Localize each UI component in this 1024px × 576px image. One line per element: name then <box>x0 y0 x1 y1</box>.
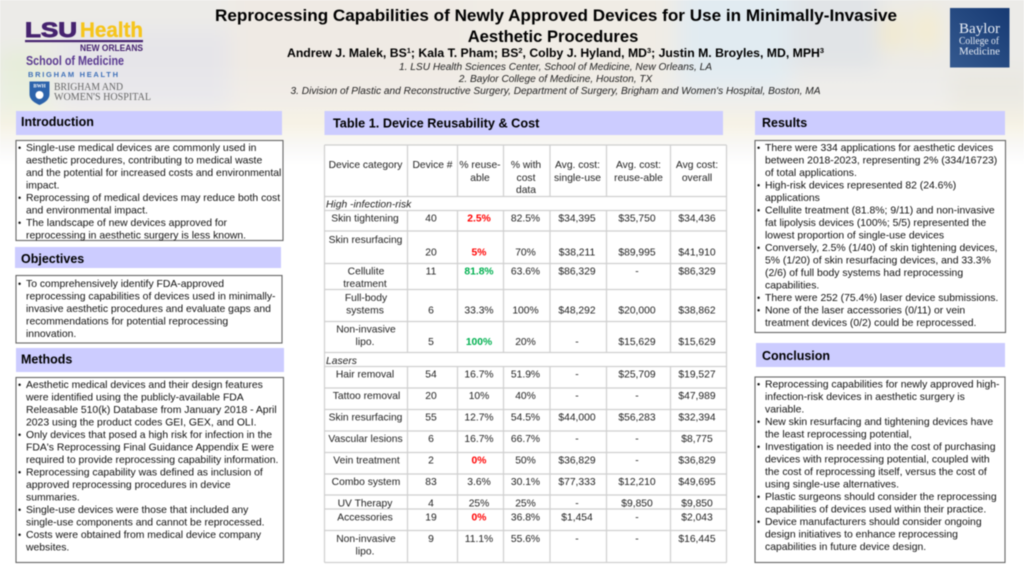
panel: methods text: Aesthetic medical devices and their design features <box>26 380 263 391</box>
table header row <box>329 160 718 196</box>
panel: results text: • <box>757 293 760 303</box>
row: non-invasive lipo, high risk: $15,629 <box>678 337 716 348</box>
panel: introduction text: Single-use medical devices are commonly used in <box>26 143 257 154</box>
row: hair removal: $19,527 <box>678 370 716 380</box>
authors: , Colby J. Hyland, MD <box>523 47 647 60</box>
panel: results text: • <box>757 180 760 190</box>
panel: introduction text: • <box>18 143 21 153</box>
table header row: overall <box>682 173 712 184</box>
row: cellulite treatment: 11 <box>426 266 437 278</box>
row: hair removal: Hair removal <box>336 370 394 380</box>
panel: conclusion text: the cost of reprocessing itself, versus the cost of <box>765 467 987 478</box>
panel: table heading <box>324 111 723 135</box>
row: non-invasive lipo, lasers: 55.6% <box>511 534 540 545</box>
row: tattoo removal: - <box>635 391 639 402</box>
table header row: single-use <box>554 173 601 184</box>
row: vascular lesions: 6 <box>428 434 434 445</box>
panel: results text: 5% (1/20) of skin resurfacing devices, and 33.3% <box>765 256 991 266</box>
row: accessories: $2,043 <box>681 512 713 524</box>
row: vascular lesions <box>328 434 713 445</box>
table header row: % with <box>511 160 541 171</box>
panel: results text: of total applications. <box>765 168 857 179</box>
row: non-invasive lipo, high risk: lipo. <box>356 337 374 348</box>
row: vein treatment: Vein treatment <box>333 456 400 466</box>
row: skin tightening <box>331 214 716 224</box>
panel: introduction text: aesthetic procedures, contributing to medical waste <box>26 156 262 166</box>
panel: objectives text: recommendations for potential reprocessing <box>26 316 228 328</box>
row: cellulite treatment: Cellulite <box>348 266 385 278</box>
logo: Baylor College of Medicine: College of <box>959 36 1000 47</box>
affiliations: 2. Baylor College of Medicine, Houston, TX <box>458 74 654 85</box>
title: Aesthetic Procedures <box>468 27 638 46</box>
row: full-body systems: 6 <box>428 306 434 316</box>
row: accessories: - <box>635 512 639 524</box>
row: non-invasive lipo, lasers: - <box>635 534 639 545</box>
row: combo system <box>332 477 716 488</box>
panel: results text: (2/6) of full body systems had reprocessing <box>765 268 963 279</box>
panel: objectives text: To comprehensively identify FDA-approved <box>26 279 224 290</box>
row: non-invasive lipo, high risk <box>336 324 716 348</box>
row: non-invasive lipo, lasers: 11.1% <box>465 534 493 545</box>
row: non-invasive lipo, high risk: Non-invasive <box>336 324 396 336</box>
row: cellulite treatment: 81.8% <box>464 266 494 278</box>
row: cellulite treatment: $86,329 <box>678 266 716 278</box>
panel: conclusion text: Device manufacturers should consider ongoing <box>765 517 982 528</box>
panel: conclusion text: • <box>757 417 760 427</box>
panel: methods text: • <box>18 505 21 515</box>
row: vein treatment <box>333 456 716 466</box>
title: Reprocessing Capabilities of Newly Approved Devices for Use in Minimally-Invasive <box>215 6 897 25</box>
row: full-body systems <box>345 293 716 316</box>
panel: conclusion text: Reprocessing capabilities for newly approved high- <box>765 380 1000 390</box>
logo: Brigham Health, Brigham and Women's Hospital: BRIGHAM HEALTH <box>28 70 118 79</box>
panel: introduction text <box>16 140 283 242</box>
row: vein treatment: - <box>635 456 639 466</box>
table header row: Avg. cost: <box>616 160 661 171</box>
panel: results heading: Results <box>762 116 807 130</box>
panel: results text: applications <box>765 193 820 204</box>
row: full-body systems: $20,000 <box>618 306 656 316</box>
row: cellulite treatment: 63.6% <box>511 266 540 278</box>
row: skin resurfacing: $41,910 <box>678 248 716 258</box>
row: skin resurfacing, lasers: $44,000 <box>558 412 596 424</box>
panel: results text: High-risk devices represented 82 (24.6%) <box>765 180 956 192</box>
panel: conclusion heading: Conclusion <box>762 349 830 363</box>
row: vascular lesions: - <box>575 434 579 445</box>
panel: introduction heading: Introduction <box>21 115 94 129</box>
table header row: Device category <box>329 160 403 171</box>
table header row: Avg cost: <box>676 160 718 171</box>
row: skin resurfacing: 70% <box>515 248 536 258</box>
panel: methods text: Costs were obtained from medical device company <box>26 530 262 541</box>
panel: results text: • <box>757 306 760 316</box>
table header row: % reuse- <box>459 160 501 171</box>
row: combo system: $49,695 <box>678 477 716 488</box>
row: skin resurfacing, lasers: Skin resurfacing <box>329 412 403 424</box>
panel: introduction text: The landscape of new devices approved for <box>26 218 228 229</box>
row: tattoo removal <box>333 391 716 402</box>
row: cellulite treatment: treatment <box>343 279 387 290</box>
row: vascular lesions: 16.7% <box>464 434 494 445</box>
logo: LSU Health New Orleans School of Medicine: NEW ORLEANS <box>80 43 143 53</box>
panel: introduction text: and the potential for increased costs and environmental <box>26 168 281 179</box>
row: combo system: $77,333 <box>558 477 596 488</box>
authors: ; Justin M. Broyles, MD, MPH <box>651 47 820 60</box>
row: combo system: 83 <box>425 477 437 488</box>
row: skin resurfacing, lasers: 54.5% <box>511 412 540 424</box>
panel: conclusion text: variable. <box>765 404 804 416</box>
panel: methods text: Releasable 510(k) Database from January 2018 - April <box>26 405 277 416</box>
panel: conclusion text: infection-risk devices in aesthetic surgery is <box>765 392 965 403</box>
logo: LSU Health New Orleans School of Medicine: School of Medicine <box>26 54 124 68</box>
panel: results text: There were 252 (75.4%) laser device submissions. <box>765 293 998 304</box>
row: UV therapy: - <box>575 498 579 510</box>
icon: BWH shield: BWH <box>33 84 46 90</box>
panel: conclusion text: devices with reprocessing potential, coupled with <box>765 454 990 466</box>
row: non-invasive lipo, lasers: lipo. <box>356 546 374 558</box>
panel: results text: Cellulite treatment (81.8%; 9/11) and non-invasive <box>765 206 995 216</box>
panel: conclusion text <box>755 377 1005 562</box>
panel: conclusion text: • <box>757 442 760 452</box>
affiliations: 1. LSU Health Sciences Center, School of Medicine, New Orleans, LA <box>399 62 712 73</box>
panel: results text: There were 334 applications for aesthetic devices <box>765 143 993 154</box>
panel: objectives text: reprocessing capabilities of devices used in minimally- <box>26 292 276 302</box>
row: UV therapy: 25% <box>469 498 489 510</box>
table header row: Avg. cost: <box>555 160 600 171</box>
panel: results text: fat lipolysis devices (100%; 5/5) represented the <box>765 218 986 229</box>
row: combo system: 3.6% <box>467 477 491 488</box>
logo: Brigham Health, Brigham and Women's Hospital <box>28 70 151 105</box>
row: skin tightening: 2.5% <box>467 214 491 224</box>
row: skin resurfacing, lasers: 12.7% <box>464 412 494 424</box>
panel: results text: treatment devices (0/2) could be reprocessed. <box>765 318 976 329</box>
panel: results text: lowest proportion of single-use devices <box>765 230 944 242</box>
row: combo system: 30.1% <box>511 477 540 488</box>
row: accessories: 19 <box>425 512 437 524</box>
panel: conclusion text: Investigation is needed into the cost of purchasing <box>765 442 996 453</box>
panel: objectives text: invasive aesthetic procedures and evaluate gaps and <box>26 304 271 315</box>
panel: conclusion text: Plastic surgeons should consider the reprocessing <box>765 492 997 503</box>
panel: objectives text: innovation. <box>26 329 76 340</box>
panel: introduction text: impact. <box>26 180 60 192</box>
authors: 3 <box>647 48 651 55</box>
row: UV therapy: 25% <box>515 498 536 510</box>
row: hair removal <box>336 370 716 380</box>
panel: objectives heading <box>15 247 281 268</box>
panel: methods heading: Methods <box>21 352 72 366</box>
panel: conclusion text: capabilities in future device design. <box>765 542 926 553</box>
logo: Baylor College of Medicine: Baylor <box>959 21 1000 37</box>
row: non-invasive lipo, lasers: 9 <box>428 534 434 545</box>
panel: methods text: Single-use devices were those that included any <box>26 505 249 516</box>
row: accessories: Accessories <box>337 512 393 524</box>
row: vein treatment: $36,829 <box>558 456 596 466</box>
table header row: cost <box>517 173 536 184</box>
row: skin resurfacing, lasers <box>329 412 716 424</box>
row: UV therapy: $9,850 <box>621 498 653 510</box>
section label: high-infection-risk: High -infection-risk <box>326 200 412 210</box>
row: skin tightening: $34,395 <box>558 214 596 224</box>
authors: 1 <box>407 48 411 55</box>
row: hair removal: 51.9% <box>511 370 540 380</box>
panel: methods text: websites. <box>25 542 69 554</box>
panel: introduction text: • <box>18 218 21 228</box>
row: skin tightening: 82.5% <box>511 214 540 224</box>
row: skin resurfacing: $89,995 <box>618 248 656 258</box>
row: vascular lesions: 66.7% <box>511 434 540 445</box>
table header row: able <box>470 173 490 184</box>
affiliations: 3. Division of Plastic and Reconstructive Surgery, Department of Surgery, Brigham and Women's Hospital, Boston, MA <box>291 86 821 97</box>
row: non-invasive lipo, lasers: Non-invasive <box>336 534 396 545</box>
row: UV therapy: 4 <box>428 498 434 510</box>
logo: LSU Health New Orleans School of Medicine: LSU <box>25 19 77 42</box>
panel: results text <box>755 140 1006 332</box>
logo: LSU Health New Orleans School of Medicine: Health <box>80 18 143 42</box>
row: UV therapy <box>338 498 713 510</box>
logo: Baylor College of Medicine: Medicine <box>959 46 1000 58</box>
table header row: reuse-able <box>614 173 663 184</box>
row: non-invasive lipo, high risk: $15,629 <box>618 337 656 348</box>
section label: lasers: Lasers <box>326 356 357 367</box>
row: hair removal: 54 <box>425 370 437 380</box>
row: skin tightening: 40 <box>425 214 437 224</box>
row: cellulite treatment: - <box>635 266 639 278</box>
panel: conclusion text: capabilities of devices used within their practice. <box>765 504 986 516</box>
row: vascular lesions: - <box>635 434 639 445</box>
authors: 2 <box>518 48 523 55</box>
panel: methods text: Only devices that posed a high risk for infection in the <box>26 430 272 441</box>
panel: results heading <box>755 111 1005 135</box>
panel: methods text: • <box>18 430 21 440</box>
panel: conclusion text: the least reprocessing potential, <box>765 430 912 440</box>
row: tattoo removal: $47,989 <box>678 391 716 402</box>
row: full-body systems: $48,292 <box>558 306 596 316</box>
panel: conclusion text: using single-use alternatives. <box>765 480 899 490</box>
table: device reusability and cost <box>324 145 726 562</box>
panel: introduction text: Reprocessing of medical devices may reduce both cost <box>26 193 280 204</box>
panel: results text: • <box>757 143 760 153</box>
row: full-body systems: 33.3% <box>464 306 494 316</box>
logo: Baylor College of Medicine <box>950 8 1010 68</box>
panel: results text: between 2018-2023, representing 2% (334/16723) <box>765 156 997 166</box>
panel: methods text: • <box>18 380 21 390</box>
row: cellulite treatment: $86,329 <box>558 266 596 278</box>
row: tattoo removal: 20 <box>425 391 437 402</box>
panel: conclusion text: • <box>757 492 760 502</box>
title <box>215 6 897 46</box>
row: vein treatment: 0% <box>472 456 486 466</box>
panel: table heading: Table 1. Device Reusability & Cost <box>333 116 540 130</box>
panel: methods text: approved reprocessing procedures in device <box>26 480 231 491</box>
row: accessories: 0% <box>472 512 486 524</box>
row: hair removal: 16.7% <box>464 370 494 380</box>
panel: results text: capabilities. <box>765 280 819 292</box>
panel: conclusion text: • <box>757 517 760 527</box>
authors: Andrew J. Malek, BS <box>287 47 400 60</box>
row: skin tightening: $35,750 <box>618 214 656 224</box>
row: non-invasive lipo, lasers: $16,445 <box>678 534 716 545</box>
row: skin resurfacing, lasers: 55 <box>425 412 437 424</box>
panel: methods text: FDA's Reprocessing Final Guidance Appendix E were <box>26 442 274 454</box>
row: skin tightening: Skin tightening <box>331 214 399 224</box>
authors: ; Kala T. Pham; BS <box>411 47 519 60</box>
row: full-body systems: $38,862 <box>678 306 716 316</box>
row: tattoo removal: 10% <box>469 391 489 402</box>
panel: methods text: were identified using the publicly-available FDA <box>25 392 244 404</box>
panel: methods text: required to provide reprocessing capability information. <box>26 455 278 466</box>
row: accessories: $1,454 <box>561 512 593 524</box>
panel: methods text: 2023 using the product codes GEI, GEX, and OLI. <box>26 418 256 428</box>
panel: methods text <box>16 378 284 562</box>
row: full-body systems: Full-body <box>345 293 388 304</box>
row: combo system: Combo system <box>332 477 400 488</box>
panel: introduction text: • <box>18 193 21 203</box>
row: cellulite treatment <box>343 266 716 290</box>
panel: methods heading <box>16 348 284 372</box>
panel: results text: None of the laser accessories (0/11) or vein <box>765 306 965 316</box>
panel: methods text: • <box>18 468 21 478</box>
panel: conclusion text: • <box>757 380 760 390</box>
row: skin resurfacing: $38,211 <box>559 248 595 258</box>
row: vein treatment: 2 <box>428 456 434 466</box>
panel: conclusion heading <box>756 343 1005 367</box>
row: UV therapy: UV Therapy <box>338 498 393 510</box>
row: tattoo removal: - <box>575 391 579 402</box>
row: tattoo removal: Tattoo removal <box>333 391 400 402</box>
panel: objectives text <box>16 276 282 343</box>
row: full-body systems: 100% <box>512 306 539 316</box>
panel: results text: • <box>757 206 760 216</box>
row: UV therapy: $9,850 <box>681 498 713 510</box>
row: hair removal: $25,709 <box>618 370 656 380</box>
row: vascular lesions: $8,775 <box>681 434 713 445</box>
affiliations <box>291 62 821 97</box>
row: skin resurfacing: Skin resurfacing <box>329 235 403 246</box>
row: skin resurfacing, lasers: $56,283 <box>618 412 656 424</box>
row: skin resurfacing: 20 <box>425 248 437 258</box>
row: vascular lesions: Vascular lesions <box>328 434 403 445</box>
panel: methods text: • <box>18 530 21 540</box>
panel: objectives heading: Objectives <box>21 252 84 266</box>
panel: conclusion text: New skin resurfacing and tightening devices have <box>765 417 993 428</box>
row: accessories: 36.8% <box>511 512 540 524</box>
row: skin resurfacing: 5% <box>472 248 486 258</box>
logo: Brigham Health, Brigham and Women's Hospital: WOMEN'S HOSPITAL <box>54 92 151 103</box>
panel: results text: • <box>757 243 760 253</box>
panel: methods text: single-use components and cannot be reprocessed. <box>26 518 265 528</box>
row: non-invasive lipo, high risk: 100% <box>466 337 492 348</box>
row: vein treatment: $36,829 <box>678 456 716 466</box>
panel: methods text: Reprocessing capability was defined as inclusion of <box>26 468 263 478</box>
row: non-invasive lipo, high risk: 5 <box>428 337 434 348</box>
row: full-body systems: systems <box>346 306 384 316</box>
table header row: data <box>516 185 536 196</box>
row: non-invasive lipo, high risk: - <box>575 337 579 348</box>
row: non-invasive lipo, high risk: 20% <box>515 337 536 348</box>
row: skin tightening: $34,436 <box>678 214 716 224</box>
panel: conclusion text: design initiatives to enhance reprocessing <box>765 530 958 540</box>
authors: 3 <box>820 48 824 55</box>
row: tattoo removal: 40% <box>515 391 536 402</box>
row: skin resurfacing, lasers: $32,394 <box>678 412 716 424</box>
logo: Brigham Health, Brigham and Women's Hospital: BRIGHAM AND <box>54 82 123 93</box>
row: combo system: $12,210 <box>618 477 656 488</box>
row: hair removal: - <box>575 370 579 380</box>
panel: introduction heading <box>16 111 282 135</box>
table header row: Device # <box>412 160 453 171</box>
panel: objectives text: • <box>18 279 21 289</box>
row: vein treatment: 50% <box>515 456 536 466</box>
panel: introduction text: and environmental impact. <box>26 206 148 216</box>
row: non-invasive lipo, lasers: - <box>575 534 579 545</box>
panel: introduction text: reprocessing in aesthetic surgery is less known. <box>26 230 246 242</box>
logo: LSU Health New Orleans School of Medicine <box>25 18 143 68</box>
row: non-invasive lipo, lasers <box>336 534 716 558</box>
panel: methods text: summaries. <box>26 492 80 504</box>
row: skin resurfacing <box>329 235 716 258</box>
row: accessories <box>337 512 713 524</box>
panel: results text: Conversely, 2.5% (1/40) of skin tightening devices, <box>765 243 998 254</box>
